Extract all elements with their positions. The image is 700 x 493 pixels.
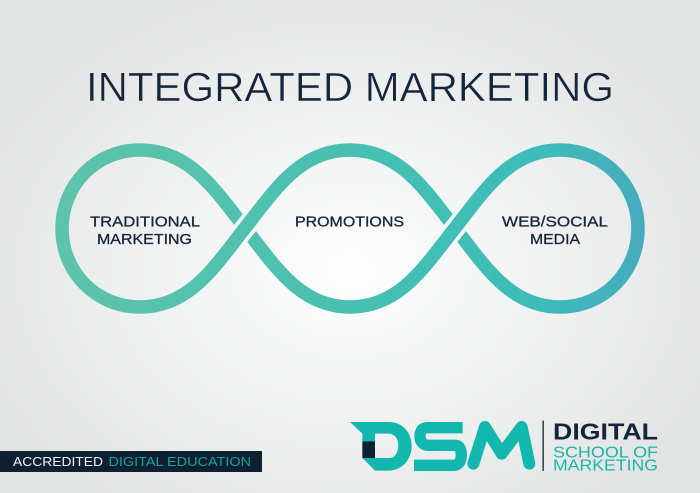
label: traditional marketing: MARKETING (97, 231, 192, 248)
footer banner: DIGITAL EDUCATION (108, 454, 251, 469)
label: traditional marketing (90, 214, 200, 248)
banner text: ACCREDITED (13, 454, 103, 469)
label: traditional marketing: TRADITIONAL (90, 214, 200, 230)
infinity loop diagram (62, 150, 638, 307)
label: web/social media: WEB/SOCIAL (502, 214, 608, 230)
label: web/social media (502, 214, 608, 248)
loop over strand: left and middle (62, 150, 350, 307)
label: web/social media: MEDIA (530, 231, 580, 248)
label: promotions: PROMOTIONS (295, 214, 404, 230)
loop over strand: middle and right (350, 150, 638, 307)
loop under strands (140, 150, 560, 307)
logo wordmark: DIGITAL (553, 418, 658, 444)
logo mark (350, 422, 529, 471)
footer banner (0, 451, 262, 472)
logo divider (542, 420, 544, 471)
title: INTEGRATED MARKETING (86, 64, 614, 110)
logo mark square (362, 441, 375, 458)
DSM logo (350, 418, 658, 475)
DSM logo: SCHOOL OF (553, 444, 658, 461)
DSM logo: MARKETING (553, 458, 658, 475)
